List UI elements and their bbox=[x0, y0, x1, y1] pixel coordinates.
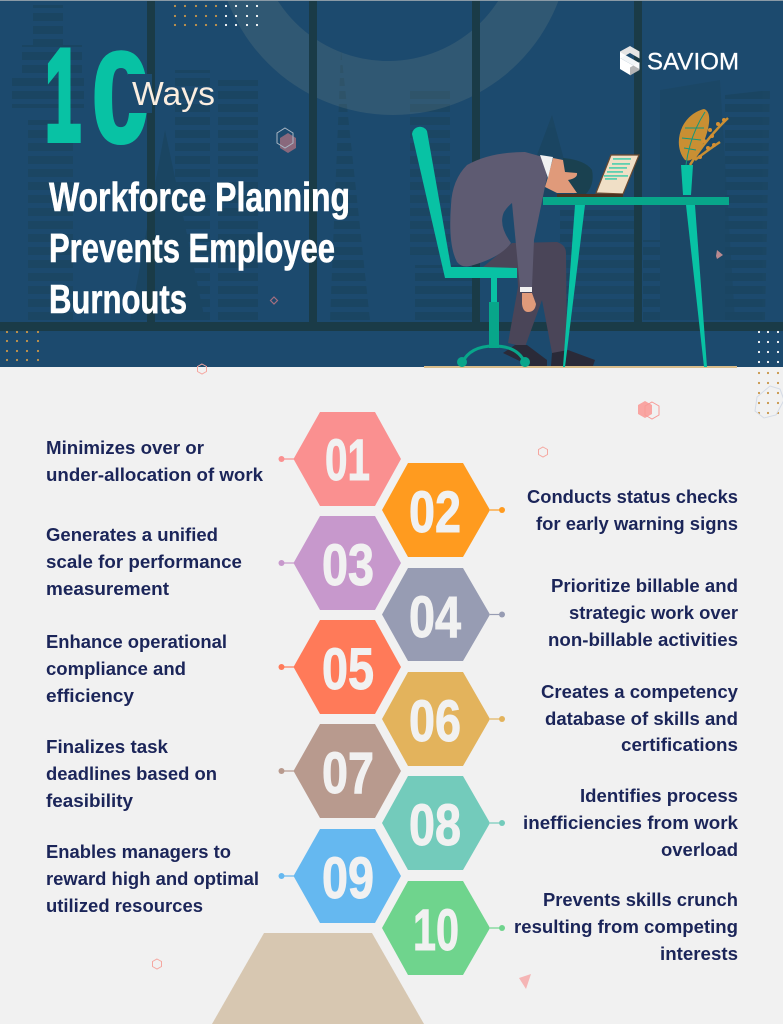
text: item 01 bbox=[46, 437, 264, 485]
dots: lower left bbox=[6, 331, 39, 361]
text: item 07: feasibility bbox=[46, 790, 134, 811]
hexagon 01: 01 bbox=[325, 428, 370, 493]
text: item 04: strategic work over bbox=[569, 602, 738, 623]
hexagon 09: 09 bbox=[322, 846, 374, 911]
hexagon 01 bbox=[278, 412, 401, 506]
hexagon 03: 03 bbox=[322, 533, 374, 598]
text: item 03: Generates a unified bbox=[46, 524, 218, 545]
text: item 10: resulting from competing bbox=[514, 916, 738, 937]
hexagon 07 bbox=[278, 724, 401, 818]
text: item 06: Creates a competency bbox=[541, 681, 739, 702]
hexagon 06: 06 bbox=[409, 689, 461, 754]
hexagon 07: 07 bbox=[322, 741, 374, 806]
pedestal bbox=[212, 933, 424, 1024]
jacket bbox=[450, 152, 547, 287]
text: item 06: certifications bbox=[621, 734, 738, 755]
window frame bbox=[0, 0, 783, 331]
chair back, seat and post bbox=[412, 127, 517, 348]
dots: right edge bbox=[758, 331, 779, 414]
text: item 01: Minimizes over or bbox=[46, 437, 204, 458]
hair bbox=[563, 158, 593, 195]
hexagon 08 bbox=[382, 776, 505, 870]
hexagon 10: 10 bbox=[413, 898, 459, 963]
dots: top bbox=[174, 5, 258, 26]
head bbox=[545, 158, 577, 193]
title: Prevents Employee bbox=[49, 225, 335, 271]
hexagon 05: 05 bbox=[322, 637, 374, 702]
text: item 02: Conducts status checks bbox=[527, 486, 738, 507]
text: item 03: scale for performance bbox=[46, 551, 242, 572]
text: item 10: Prevents skills crunch bbox=[543, 889, 738, 910]
collar bbox=[540, 155, 553, 178]
text: item 07 bbox=[46, 736, 217, 811]
hexagon 10 bbox=[382, 881, 505, 975]
desk bbox=[543, 197, 729, 367]
text: item 09: Enables managers to bbox=[46, 841, 231, 862]
small decorative hexagons bbox=[152, 128, 783, 989]
text: item 04 bbox=[548, 575, 738, 650]
laptop bbox=[557, 155, 639, 197]
text: item 09 bbox=[46, 841, 259, 916]
hexagon 02: 02 bbox=[409, 480, 461, 545]
heading: big number 10 bbox=[45, 22, 152, 170]
text: item 05: Enhance operational bbox=[46, 631, 227, 652]
text: item 08: overload bbox=[661, 839, 738, 860]
text: item 07: deadlines based on bbox=[46, 763, 217, 784]
hexagon 04 bbox=[382, 568, 505, 661]
text: item 09: utilized resources bbox=[46, 895, 203, 916]
heading: big number 10: 0 bbox=[92, 27, 150, 170]
header banner bbox=[0, 0, 783, 367]
shoes bbox=[503, 345, 595, 366]
plant bbox=[679, 109, 728, 195]
hexagon 02 bbox=[382, 463, 505, 557]
logo: Saviom: SAVIOM bbox=[647, 48, 739, 76]
text: item 04: non-billable activities bbox=[548, 629, 738, 650]
text: item 08 bbox=[523, 785, 739, 860]
text: item 09: reward high and optimal bbox=[46, 868, 259, 889]
text: item 03 bbox=[46, 524, 242, 599]
hexagon 05 bbox=[278, 620, 401, 714]
text: item 06: database of skills and bbox=[545, 708, 738, 729]
text: item 01: under-allocation of work bbox=[46, 464, 264, 485]
text: item 05 bbox=[46, 631, 227, 706]
text: item 07: Finalizes task bbox=[46, 736, 169, 757]
hexagon 03 bbox=[278, 516, 401, 610]
text: item 02 bbox=[527, 486, 738, 534]
text: item 05: compliance and bbox=[46, 658, 186, 679]
text: item 08: inefficiencies from work bbox=[523, 812, 739, 833]
decorative ring bbox=[216, 0, 570, 115]
illustration: burned-out employee at desk bbox=[412, 109, 737, 368]
text: item 02: for early warning signs bbox=[536, 513, 738, 534]
floor line bbox=[424, 366, 737, 368]
text: item 05: efficiency bbox=[46, 685, 135, 706]
text: item 04: Prioritize billable and bbox=[551, 575, 738, 596]
title bbox=[49, 174, 350, 322]
hexagon 06 bbox=[382, 672, 505, 766]
hexagon 08: 08 bbox=[409, 793, 461, 858]
text: item 06 bbox=[541, 681, 739, 755]
hexagon 04: 04 bbox=[409, 585, 461, 650]
chair base bbox=[457, 346, 530, 367]
text: item 08: Identifies process bbox=[580, 785, 738, 806]
trousers bbox=[483, 242, 567, 353]
title: Workforce Planning bbox=[49, 174, 350, 220]
title: Burnouts bbox=[49, 276, 187, 322]
text: item 10: interests bbox=[660, 943, 738, 964]
heading: big number 10: 1 bbox=[45, 22, 81, 168]
cuff and hand bbox=[520, 287, 536, 312]
text: item 10 bbox=[514, 889, 738, 964]
text: item 03: measurement bbox=[46, 578, 169, 599]
heading: Ways: Ways bbox=[132, 75, 215, 112]
hexagon 09 bbox=[278, 829, 401, 923]
